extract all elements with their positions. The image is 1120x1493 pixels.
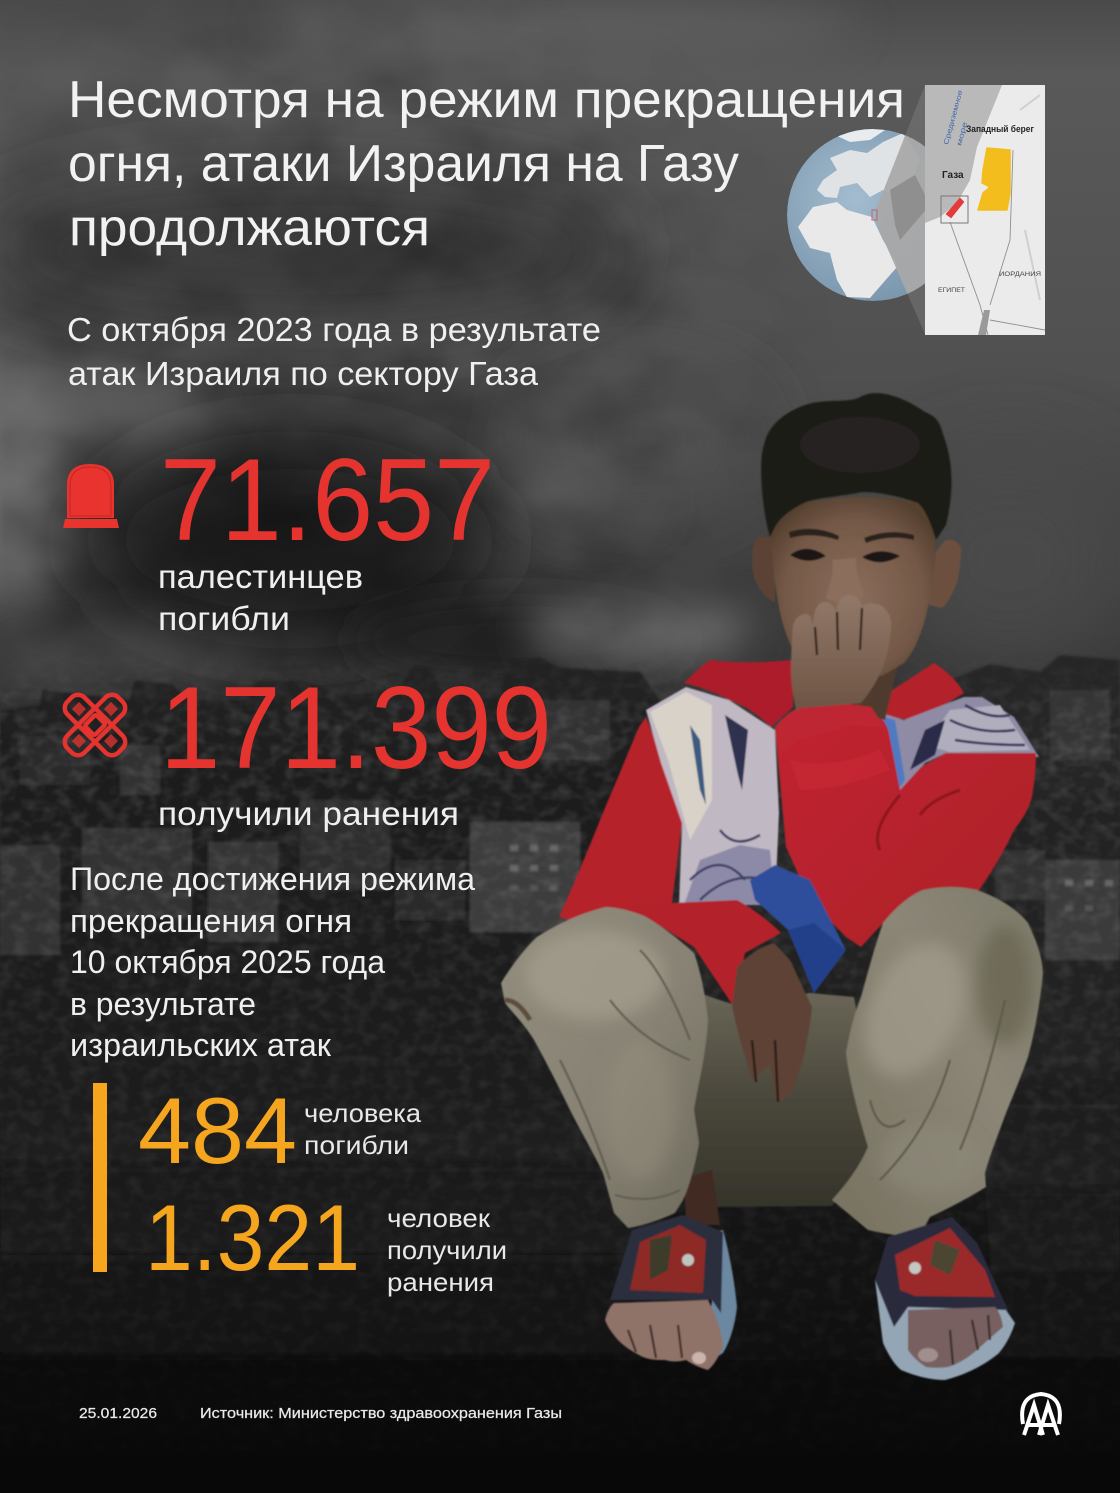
boy photo cutout [501,393,1043,1380]
map labels: ИОРДАНИЯ [999,271,1041,278]
right foot [908,1307,1003,1368]
hand at mouth [791,595,891,710]
left ankle [684,1170,720,1225]
stat: ceasefire killed number: 484 [138,1078,297,1183]
sleeve cuff over wrist [775,704,885,740]
subtitle: С октября 2023 года в результате [67,311,601,348]
stat: ceasefire killed label: погибли [304,1130,409,1160]
background: city skyline [0,655,1120,1400]
stat: ceasefire wounded label: получили [387,1235,507,1265]
stat: killed number: 71.657 [160,434,495,565]
ceasefire text block: 10 октября 2025 года [70,944,385,980]
orange accent bar [93,1083,107,1272]
sweatshirt print left [646,687,779,905]
stat: ceasefire killed label: человека [304,1098,422,1128]
map labels: Западный берег [966,124,1034,134]
left hood [684,660,793,727]
red sleeve right [775,707,1036,947]
icon: siren [63,464,119,528]
ceasefire text block: израильских атак [70,1027,332,1063]
left ear [752,536,775,602]
locator map: globe and zoomed panel [787,85,1045,335]
stat: wounded label: получили ранения [158,795,459,832]
date: 25.01.2026 [79,1406,157,1422]
eyes [790,549,900,562]
neck [825,655,900,720]
center pants [680,990,880,1207]
stat: ceasefire wounded number: 1.321 [145,1185,360,1290]
gaza box [941,196,968,223]
west bank [978,148,1010,210]
subtitle [67,311,601,392]
map labels [938,89,1041,294]
brows [789,529,914,543]
right sandal strap [875,1217,1008,1327]
background: rubble texture [0,680,1120,1320]
map zoom cone backdrop [875,85,925,334]
sweatshirt print right [871,697,1039,793]
red forearm left [559,900,781,1007]
title: огня, атаки Израиля на Газу [68,135,739,193]
nose [826,558,864,603]
ceasefire text block: прекращения огня [70,903,352,939]
map panel [925,85,1045,335]
map labels: Средиземное [943,89,964,146]
left sandal strap [610,1215,723,1313]
right ear [929,540,961,608]
map labels: море [956,121,969,147]
logo: Anadolu Agency [1022,1394,1060,1435]
left knee highlights [525,930,675,1180]
face [771,497,936,676]
left knee [501,907,708,1228]
title [68,71,905,257]
gaza marker on globe [872,210,877,220]
right knee [832,887,1043,1237]
stat: ceasefire wounded label: ранения [387,1267,494,1297]
hair [761,393,952,540]
right knee highlights [845,925,1033,1195]
background: smoke sky over ruined city [0,0,1120,1006]
stat: ceasefire wounded label [387,1203,507,1297]
map labels: ЕГИПЕТ [938,287,965,294]
source: Источник: Министерство здравоохранения Газы [200,1406,562,1422]
left sleeve [559,717,682,930]
left sandal sole [700,1230,737,1365]
globe [787,129,925,301]
stat: killed label [158,558,363,637]
ceasefire text block: После достижения режима [70,861,475,897]
stat: killed label: погибли [158,600,290,637]
icon: crossed bandages [61,691,129,759]
background: bottom darkening [0,1360,1120,1493]
lower hand [732,943,812,1103]
map labels: Газа [942,170,964,181]
title: продолжаются [69,199,430,257]
title: Несмотря на режим прекращения [68,71,905,129]
stat: ceasefire killed label [304,1098,422,1160]
blue cloth [750,865,846,993]
right sandal sole [875,1280,1015,1380]
subtitle: атак Израиля по сектору Газа [68,355,539,392]
gaza strip [947,199,963,217]
stat: wounded number: 171.399 [160,662,552,793]
stat: killed label: палестинцев [158,558,363,595]
right hood [878,663,964,720]
stat: ceasefire wounded label: человек [387,1203,491,1233]
ceasefire text block: в результате [70,986,256,1022]
left foot [605,1300,723,1370]
ceasefire text block [70,861,475,1063]
shaded part of globe under cone [875,135,925,294]
